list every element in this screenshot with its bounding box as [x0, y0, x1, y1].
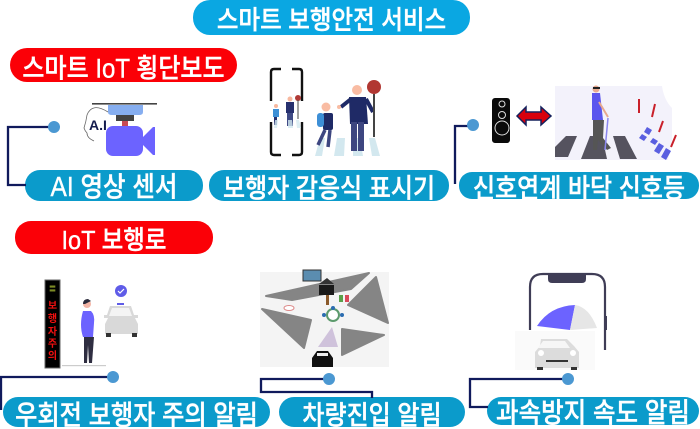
icon: LED sign pole: 의	[48, 350, 57, 362]
connector: speeding	[470, 373, 574, 407]
illustration: intersection map	[260, 270, 389, 367]
icon: AI camera: A.I	[89, 117, 107, 133]
icon: LED sign pole: 주	[48, 338, 57, 350]
label: AI video sensor	[25, 170, 203, 201]
icon: LED sign pole: 보	[48, 300, 57, 312]
icon: AI camera	[84, 103, 157, 156]
label: linked floor signal: 신호연계 바닥 신호등	[473, 174, 685, 204]
icon: LED sign pole: 자	[48, 326, 57, 338]
illustration: phone with speed gauge	[530, 274, 607, 350]
connector: floor signal	[455, 119, 479, 184]
heading: IoT walkway	[15, 221, 213, 254]
icon: double arrow	[517, 107, 551, 125]
label: vehicle entry alert	[279, 397, 465, 427]
label: speeding prevention alert: 과속방지 속도 알림	[496, 398, 690, 428]
icon: crossing guard and child	[315, 80, 381, 156]
heading: IoT walkway: IoT 보행로	[62, 225, 166, 254]
icon: LED sign pole: 행	[48, 313, 57, 325]
icon: LED sign pole	[45, 280, 60, 368]
connector: right-turn alert	[1, 371, 119, 410]
title	[193, 0, 470, 35]
icon: floor signal speaker	[492, 98, 510, 143]
connector: AI sensor	[8, 121, 60, 185]
label: pedestrian detection display: 보행자 감응식 표시기	[223, 174, 435, 204]
illustration: person and car	[62, 285, 138, 366]
icon: car front	[515, 331, 595, 370]
icon: LED sign pole: 〓	[49, 285, 56, 293]
title: 스마트 보행안전 서비스	[217, 5, 446, 34]
connector: vehicle entry	[261, 373, 372, 398]
label: AI video sensor: AI 영상 센서	[51, 173, 177, 203]
heading: smart IoT crosswalk: 스마트 IoT 횡단보도	[22, 53, 225, 83]
icon: pedestrian display frame	[271, 69, 302, 155]
illustration: blind pedestrian at floor signal	[555, 86, 676, 160]
